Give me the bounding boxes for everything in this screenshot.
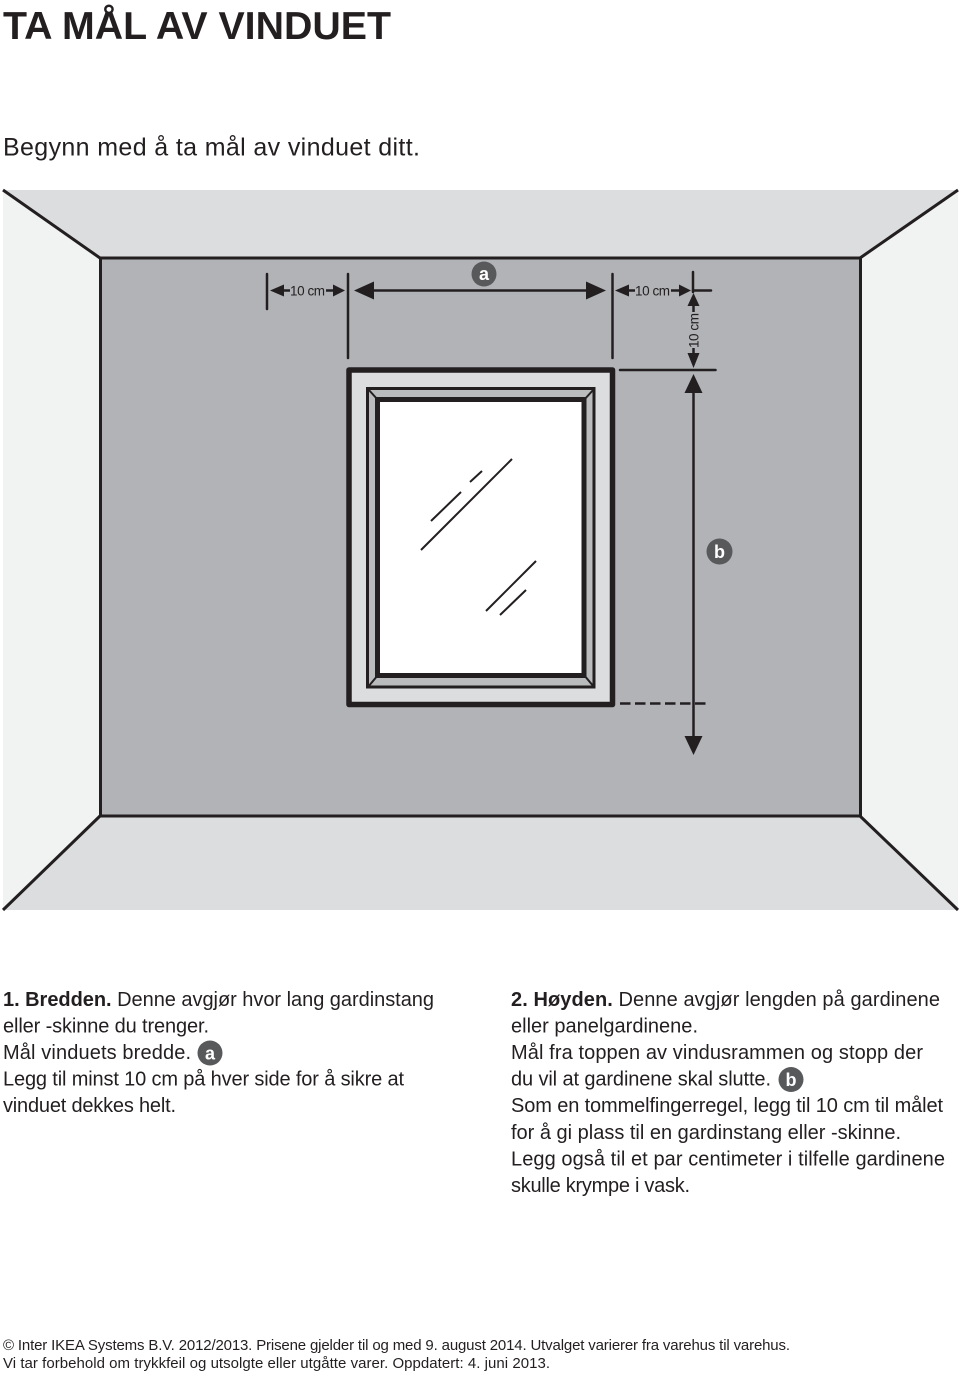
footer text (3, 1337, 790, 1372)
label: vertical 10 cm: 10 cm (686, 313, 702, 348)
footer text: Vi tar forbehold om trykkfeil og utsolgte eller utgåtte varer. Oppdatert: 4. juni 2013. (3, 1355, 550, 1372)
text block: 1. width: vinduet dekkes helt. (3, 1095, 176, 1117)
left wall (3, 190, 100, 910)
room corner lines (3, 190, 958, 910)
label: left 10 cm: 10 cm (290, 284, 325, 298)
text block: 1. width: eller -skinne du trenger. (3, 1016, 209, 1038)
arrow: top 10 cm (688, 293, 700, 368)
text block: 2. height: eller panelgardinene. (511, 1016, 698, 1038)
text block: 2. height: Mål fra toppen av vindusrammen og stopp der (511, 1042, 923, 1064)
floor (3, 816, 958, 910)
arrow: full width (354, 282, 606, 300)
badge a in text: a (205, 1044, 216, 1064)
badge a (472, 262, 496, 286)
text block: 2. height: 2. Høyden. Denne avgjør lengden på gardinene (511, 989, 940, 1011)
text block: 2. height: for å gi plass til en gardinstang eller -skinne. (511, 1122, 901, 1144)
room illustration (3, 190, 958, 910)
right wall (860, 190, 958, 910)
text block: 2. height: Som en tommelfingerregel, legg til 10 cm til målet (511, 1095, 943, 1117)
window glass (378, 400, 584, 676)
back wall (100, 258, 860, 816)
label: right 10 cm: 10 cm (635, 284, 670, 298)
badge a in text (198, 1040, 222, 1066)
badge b in text: b (786, 1070, 796, 1090)
badge a: a (479, 264, 490, 284)
height measurement b (620, 272, 732, 755)
subtitle: Begynn med å ta mål av vinduet ditt. (3, 134, 420, 162)
text block: 2. height: skulle krympe i vask. (511, 1175, 690, 1197)
text block: 1. width: 1. Bredden. Denne avgjør hvor lang gardinstang (3, 989, 434, 1011)
text block: 2. height (511, 989, 945, 1197)
arrow: right 10 cm (615, 284, 691, 296)
text block: 1. width: Mål vinduets bredde. (3, 1042, 191, 1064)
badge b (706, 538, 732, 564)
arrow: curtain length (684, 374, 702, 755)
tick marks (267, 274, 612, 358)
width measurement a (267, 262, 691, 358)
guide lines (620, 272, 716, 370)
window inner frame (368, 388, 594, 687)
arrow: left 10 cm (270, 284, 345, 296)
window frame mitres (368, 389, 594, 687)
text block: 1. width: Legg til minst 10 cm på hver side for å sikre at (3, 1068, 404, 1090)
text block: 1. width (3, 989, 434, 1117)
glass reflection lines (421, 459, 536, 615)
ceiling (3, 190, 958, 258)
badge b in text (778, 1067, 804, 1092)
dashed window sill line (620, 702, 707, 705)
badge b: b (714, 542, 725, 562)
window (349, 370, 612, 704)
text block: 2. height: Legg også til et par centimeter i tilfelle gardinene (511, 1148, 945, 1170)
window outer frame (349, 370, 612, 704)
footer text: © Inter IKEA Systems B.V. 2012/2013. Prisene gjelder til og med 9. august 2014. Utvalget varierer fra varehus til varehus. (3, 1337, 790, 1354)
text block: 2. height: du vil at gardinene skal slutte. (511, 1068, 771, 1090)
title: TA MÅL AV VINDUET (3, 4, 391, 48)
